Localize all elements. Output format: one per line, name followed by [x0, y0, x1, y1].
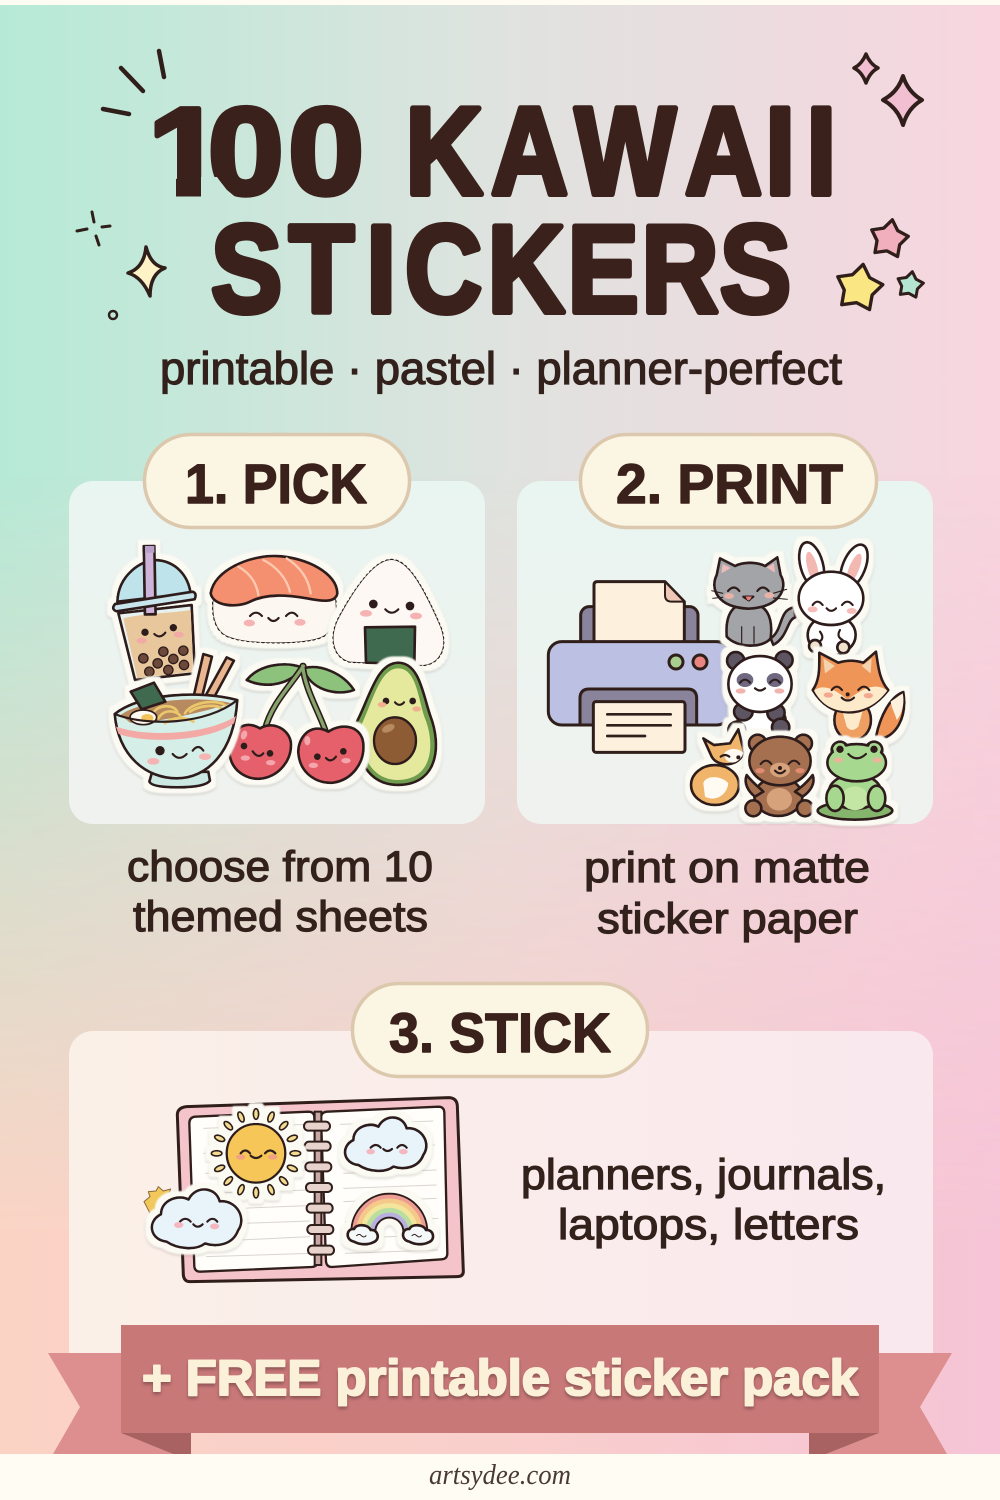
sticker: onigiri [336, 562, 441, 664]
icon: printer [548, 582, 730, 752]
caption: print: print on matte [584, 844, 870, 892]
sticker: sushi [211, 556, 337, 640]
title: 100 [148, 82, 364, 221]
sticker: panda [727, 651, 793, 738]
heading: 3. stick: 3. STICK [389, 1001, 611, 1064]
footer url: artsydee.com [429, 1460, 571, 1491]
caption: pick: themed sheets [133, 893, 428, 941]
food stickers illustration [113, 546, 441, 787]
panel: pick [69, 434, 485, 941]
caption: print [584, 844, 870, 943]
heading: 1. pick: 1. PICK [185, 452, 367, 515]
planner pages [189, 1107, 447, 1272]
caption: pick: choose from 10 [127, 843, 433, 891]
title: STICKERS [211, 199, 791, 339]
sticker: small sun peeking [144, 1187, 171, 1213]
sticker: boba tea [113, 546, 196, 680]
heading: 2. print: 2. PRINT [616, 452, 843, 515]
sticker: bear [745, 735, 814, 816]
sticker: avocado [356, 663, 436, 785]
planner tabs [445, 1116, 458, 1259]
sticker: fox [813, 652, 904, 741]
planner cover [177, 1098, 463, 1282]
planner rings [304, 1112, 334, 1265]
decorative burst lines and sparkles, left [77, 51, 165, 319]
caption: pick [127, 843, 433, 941]
sticker: rainbow [348, 1194, 433, 1244]
decorative sparkles and stars, right [833, 54, 925, 311]
heading: 3. stick [352, 984, 648, 1076]
ribbon text: + FREE printable sticker pack [142, 1350, 858, 1406]
footer [0, 1454, 1000, 1500]
sticker: ramen bowl [115, 654, 237, 787]
sticker: bunny [795, 540, 873, 655]
caption: stick: planners, journals, [521, 1151, 886, 1199]
title: KAWAII [405, 81, 836, 221]
printer and animal stickers illustration [548, 540, 904, 820]
sticker: cloud left [152, 1189, 241, 1248]
panel: stick [69, 984, 933, 1401]
ribbon banner [48, 1325, 952, 1454]
sticker: sun [211, 1109, 301, 1198]
caption: print: sticker paper [597, 895, 858, 943]
title [154, 104, 832, 316]
sticker: corgi [691, 729, 744, 805]
open planner with stickers illustration [144, 1098, 463, 1282]
heading: 2. print [580, 434, 876, 528]
sticker: frog [818, 742, 892, 820]
sticker: cherries [229, 664, 363, 783]
page lines [203, 1121, 438, 1257]
caption: stick: laptops, letters [558, 1201, 859, 1249]
heading: 1. pick [144, 434, 410, 528]
panel: print [517, 434, 933, 943]
caption: stick [521, 1151, 886, 1249]
sticker: cat [712, 557, 795, 646]
subtitle: printable · pastel · planner-perfect [160, 343, 842, 394]
sticker: cloud right [345, 1117, 426, 1171]
